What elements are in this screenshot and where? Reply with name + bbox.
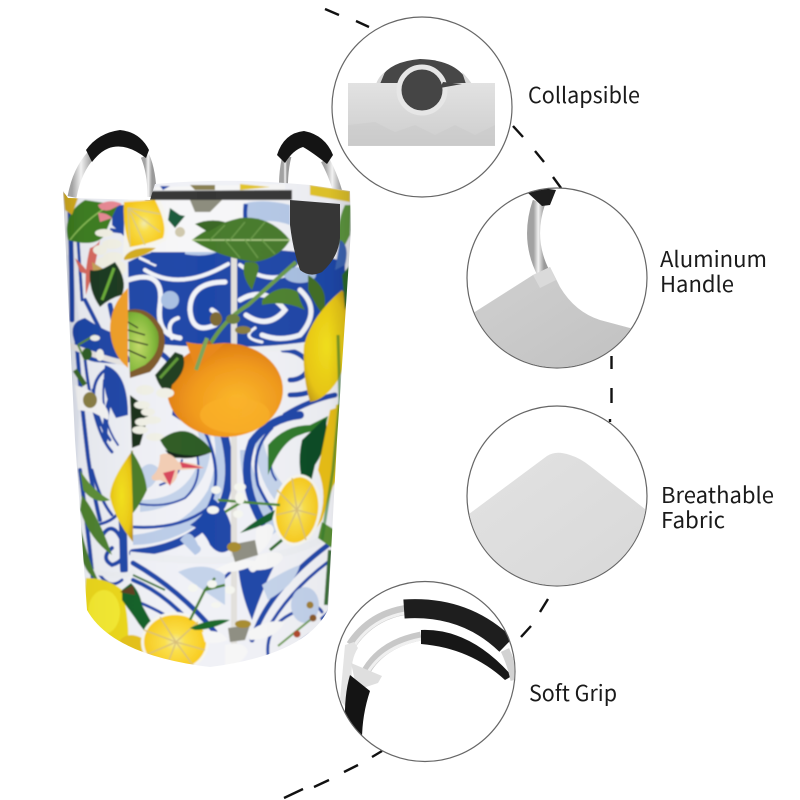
white flower center	[215, 524, 283, 572]
berry sprig bottom-right	[278, 602, 316, 646]
white blossom sprig left	[75, 335, 104, 385]
circle: folded basket	[332, 17, 512, 197]
feature: soft grip	[335, 582, 617, 762]
large leaf top	[192, 218, 290, 262]
label: Collapsible: Collapsible	[528, 78, 640, 110]
label: Breathable Fabric: Fabric	[661, 503, 725, 535]
lemon slice right	[272, 473, 321, 544]
white daisy left	[75, 385, 109, 420]
pink petals left	[98, 201, 122, 222]
white flower bottom	[202, 620, 285, 665]
dark leaf beneath kiwi	[155, 352, 184, 395]
dark rim strip	[145, 190, 292, 200]
cut lemon left	[110, 450, 133, 542]
feature: collapsible	[332, 17, 640, 197]
small flower under rim	[168, 200, 222, 237]
orange half behind kiwi	[110, 288, 128, 368]
feature: aluminum handle	[467, 188, 767, 380]
kiwi half	[128, 309, 165, 378]
dashed connector line	[284, 9, 612, 798]
label: Aluminum Handle	[660, 242, 767, 299]
black pocket	[290, 200, 340, 275]
large orange	[167, 338, 283, 437]
green edge right	[338, 205, 351, 255]
feature: breathable fabric	[465, 406, 774, 590]
green sprig bottom	[188, 578, 235, 630]
green leaves lower-left	[80, 470, 110, 501]
label: Breathable Fabric	[661, 478, 774, 535]
bottom-left lemon	[85, 577, 144, 652]
tile light-blue bands lower	[132, 436, 226, 546]
yellow lemon slice top	[123, 200, 168, 260]
label: Aluminum Handle: Aluminum	[660, 242, 767, 274]
circle: grip close-up	[335, 582, 515, 762]
lemon right	[304, 290, 350, 402]
twig with buds	[202, 260, 326, 346]
right handle	[277, 131, 341, 204]
tile grout lines	[231, 205, 237, 675]
top leaf left	[67, 200, 118, 243]
white blossoms center-left	[130, 385, 174, 448]
dark leaf left	[90, 262, 124, 307]
dark leaf bottom-left	[121, 582, 152, 630]
circle: fabric close-up	[465, 406, 650, 590]
pink flower	[152, 454, 204, 486]
circle: handle close-up	[467, 188, 647, 380]
label: Breathable Fabric: Breathable	[661, 478, 774, 510]
upper right light tile corner	[242, 200, 290, 226]
label: Aluminum Handle: Handle	[660, 267, 734, 299]
dark leaves right	[268, 416, 328, 475]
lemon behind slice right	[316, 408, 338, 528]
basket product illustration	[50, 130, 360, 680]
dark leaf center	[160, 431, 212, 458]
tile pattern bottom	[133, 545, 328, 655]
white sprig center	[207, 483, 280, 518]
back rim decor	[155, 184, 285, 190]
lemon slice bottom	[141, 612, 209, 672]
tile scrollwork upper	[128, 250, 311, 342]
blue tile panel upper	[128, 246, 232, 347]
basket body with printed pattern	[63, 181, 351, 667]
white blossom cluster upper-left	[93, 229, 126, 275]
left handle	[72, 130, 152, 197]
left side panel pattern	[60, 195, 128, 675]
label: Soft Grip: Soft Grip	[529, 676, 617, 708]
leaf under slice	[240, 510, 275, 533]
tile scrollwork lower	[133, 348, 335, 553]
